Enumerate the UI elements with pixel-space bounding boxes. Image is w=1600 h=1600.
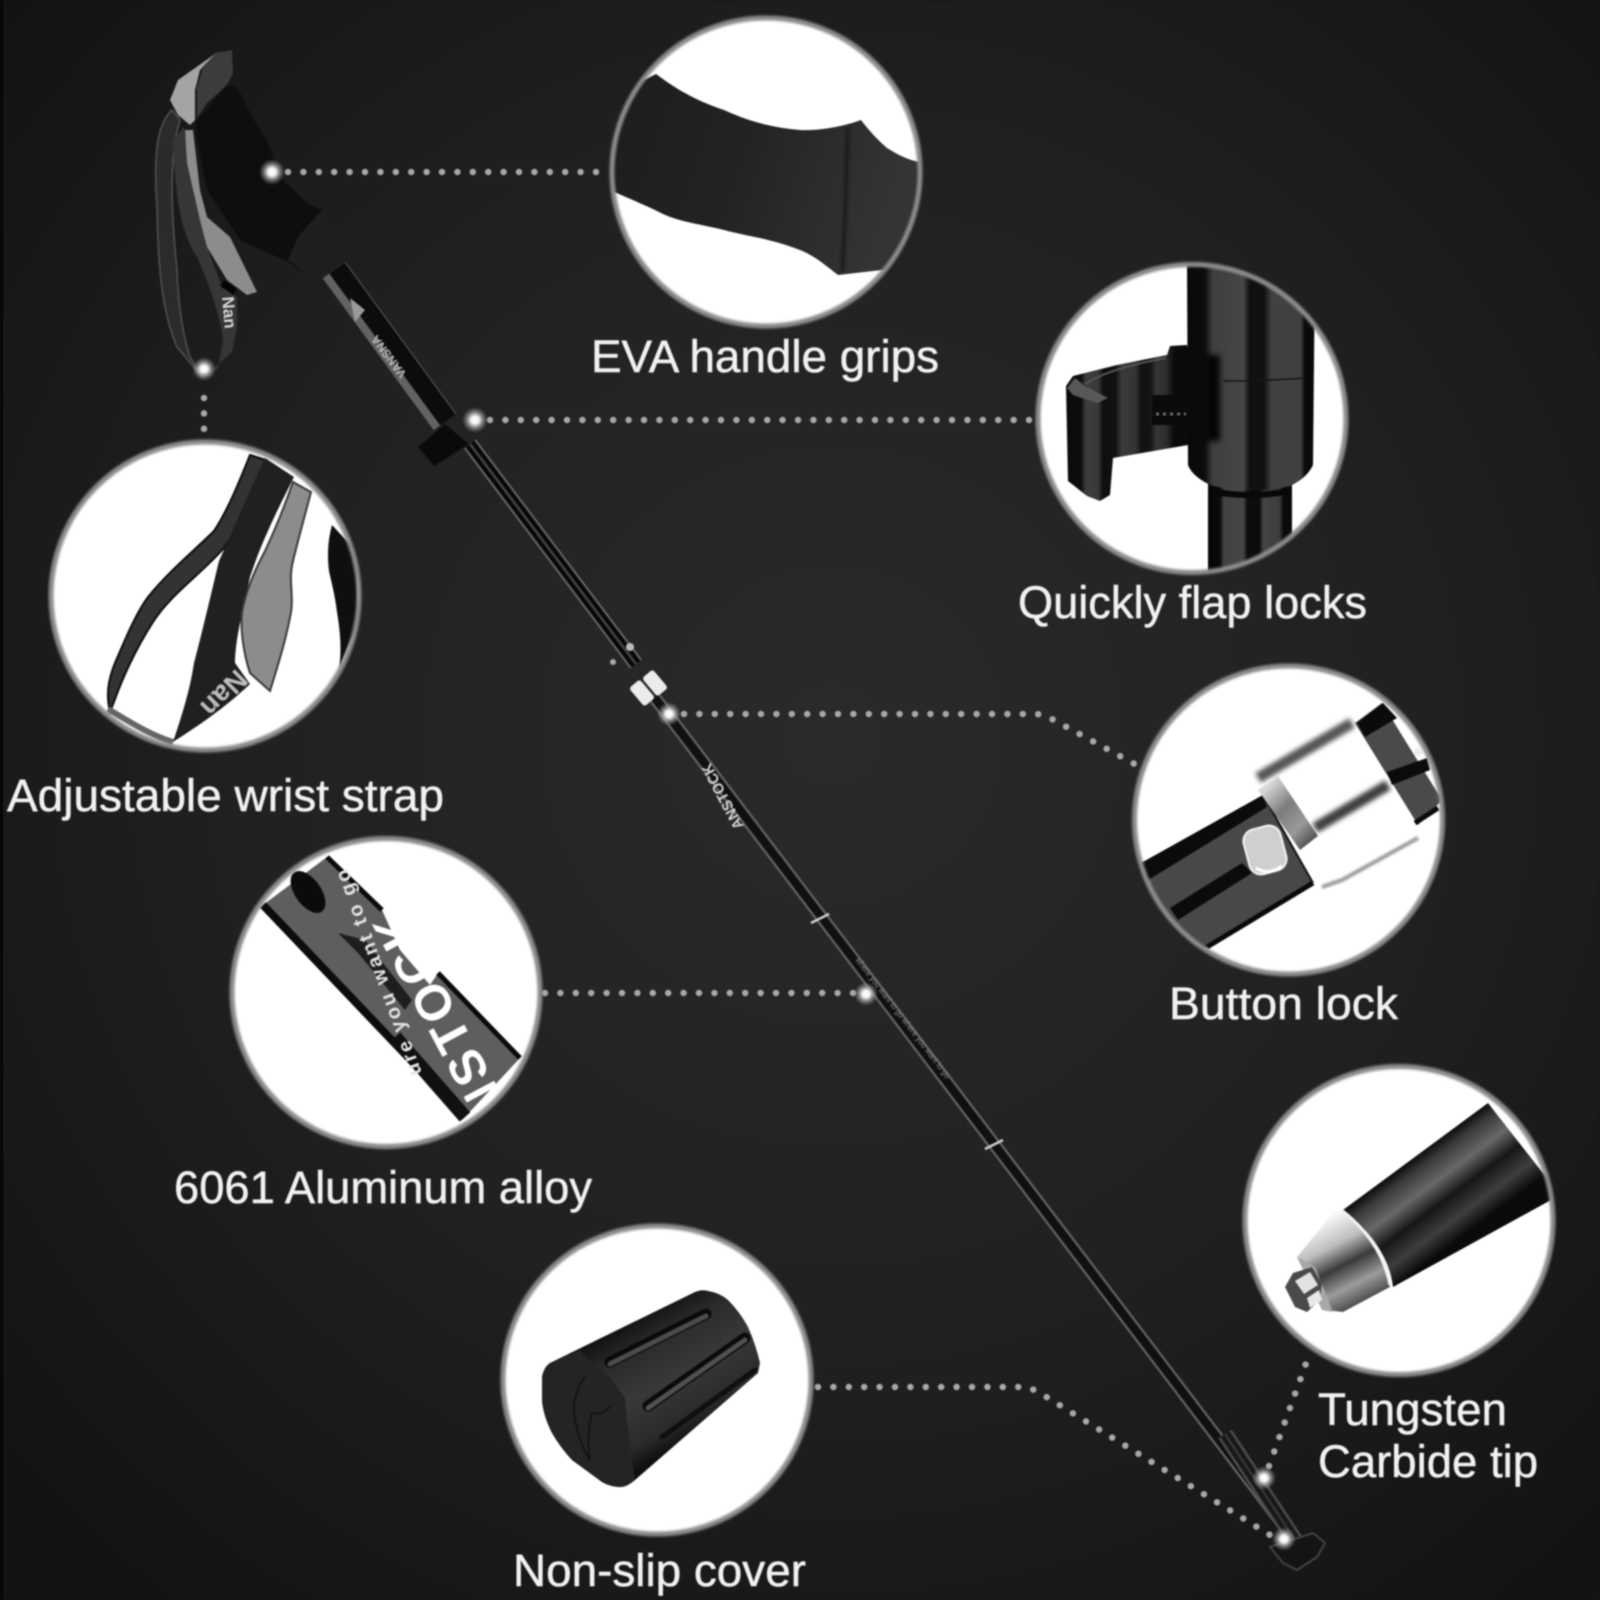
panel: Adjustable wrist strap: Nan	[194, 664, 254, 723]
lower pole shaft: where you want to go where you want to go	[853, 954, 953, 1080]
middle pole shaft	[470, 444, 636, 664]
connector: non-slip cover	[818, 1387, 1270, 1535]
flap lock on pole	[417, 423, 470, 467]
connector: handle grip	[288, 169, 605, 175]
rubber foot on pole	[1270, 1533, 1325, 1570]
wrist strap on pole	[156, 110, 257, 378]
heading: Tungsten Carbide tip: Tungsten	[1318, 1384, 1507, 1435]
wrist strap on pole: Nan	[218, 296, 240, 329]
heading: EVA handle grips: EVA handle grips	[591, 331, 939, 382]
connector: wrist strap	[201, 398, 207, 436]
lower pole shaft	[655, 698, 1295, 1540]
panel: Tungsten Carbide tip	[1245, 1066, 1560, 1374]
heading: Tungsten Carbide tip: Carbide tip	[1318, 1436, 1538, 1487]
heading: Tungsten Carbide tip	[1318, 1384, 1538, 1487]
heading: Quickly flap locks: Quickly flap locks	[1018, 577, 1367, 628]
hotspot: button lock	[657, 702, 681, 726]
heading: 6061 Aluminum alloy: 6061 Aluminum alloy	[174, 1162, 592, 1213]
heading: Adjustable wrist strap: Adjustable wrist strap	[7, 770, 444, 821]
connector: aluminum alloy	[545, 990, 855, 996]
panel: 6061 Aluminum alloy	[232, 838, 540, 1146]
connector: button lock	[684, 714, 1140, 767]
panel: Quickly flap locks	[1038, 260, 1346, 580]
hotspot: aluminum alloy	[854, 982, 878, 1006]
hotspot: handle grip	[259, 159, 285, 185]
heading: Non-slip cover: Non-slip cover	[513, 1545, 806, 1596]
handle grip on pole	[170, 50, 343, 277]
lower pole shaft: ANSTOCK	[699, 760, 748, 832]
heading: Button lock: Button lock	[1169, 978, 1399, 1029]
connector: tungsten tip	[1269, 1358, 1308, 1466]
hotspot: wrist strap	[192, 357, 216, 381]
hotspot: tungsten tip	[1252, 1466, 1276, 1490]
panel: Non-slip cover	[503, 1226, 811, 1534]
panel: 6061 Aluminum alloy: ure you want to go	[331, 866, 427, 1079]
trekking pole	[156, 50, 1325, 1570]
panel: EVA handle grips	[605, 18, 925, 326]
connector: flap lock	[490, 417, 1035, 423]
upper pole shaft	[334, 268, 448, 422]
panel: Adjustable wrist strap	[51, 442, 359, 750]
panel: Button lock	[1125, 666, 1442, 974]
hotspot: flap lock	[462, 407, 488, 433]
upper pole shaft: VANSNA	[368, 332, 409, 381]
hotspot: non-slip cover	[1272, 1527, 1296, 1551]
silver collar on pole	[610, 643, 668, 707]
panel: 6061 Aluminum alloy: NSTOCK	[360, 898, 519, 1131]
